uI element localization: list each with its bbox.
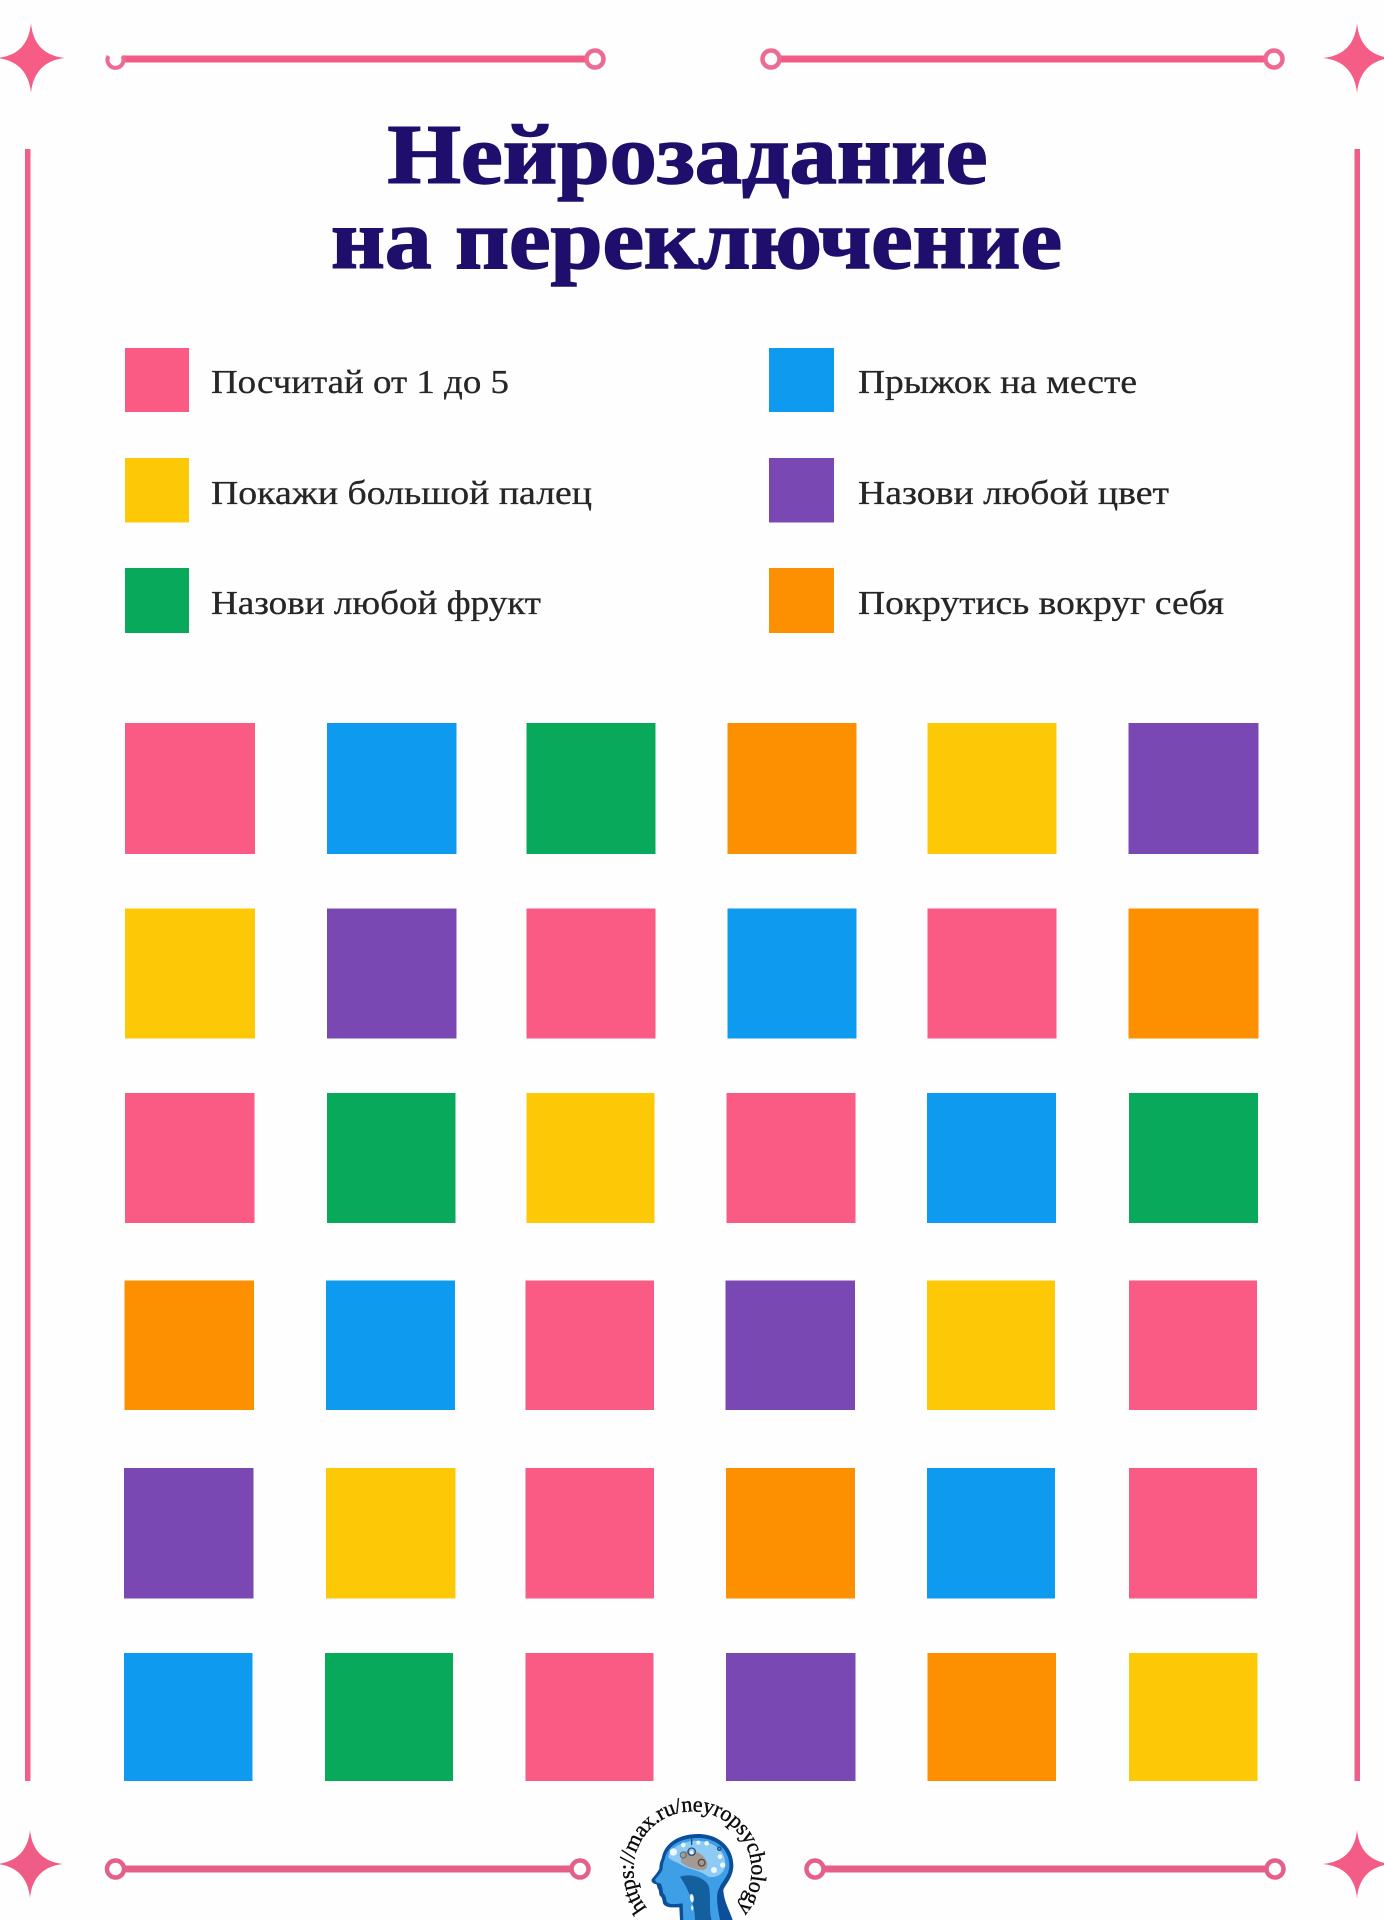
grid row 4 [124,1280,1257,1410]
colour grid [124,723,1258,1781]
grid row 1 [125,723,1258,854]
legend item: orange: Покрутись вокруг себя [858,585,1224,622]
title: на переключение [331,193,1062,287]
circular url text: https://max.ru/neyropsychology [620,1798,767,1917]
grid row 5 [124,1468,1257,1598]
legend item: blue: Прыжок на месте [858,364,1137,401]
icon: star bottom left [0,1830,63,1898]
icon: star top left [0,23,65,93]
grid row 6 [124,1653,1258,1781]
connector: bottom right line [806,1860,1284,1878]
legend item: blue [769,348,1137,412]
legend item: pink: Посчитай от 1 до 5 [211,364,509,401]
connector: top right line [762,50,1282,68]
legend item: purple [769,458,1169,522]
legend item: yellow: Покажи большой палец [211,475,592,512]
logo: head with circular url [620,1798,767,1920]
legend item: purple: Назови любой цвет [858,475,1169,512]
legend item: orange [769,568,1224,633]
title [331,108,1062,287]
legend item: pink [125,348,509,412]
grid row 3 [125,1093,1258,1223]
legend [125,348,1224,633]
left vertical line [25,149,30,1781]
legend item: green [125,568,541,633]
connector: bottom left line [107,1860,588,1878]
legend item: yellow [125,458,592,522]
grid row 2 [125,908,1258,1038]
connector: top left line [107,50,603,68]
legend item: green: Назови любой фрукт [211,585,541,622]
icon: star top right [1323,23,1384,93]
title: Нейрозадание [388,108,988,202]
icon: star bottom right [1323,1830,1384,1898]
right vertical line [1354,149,1360,1781]
icon: head with brain [651,1834,733,1920]
